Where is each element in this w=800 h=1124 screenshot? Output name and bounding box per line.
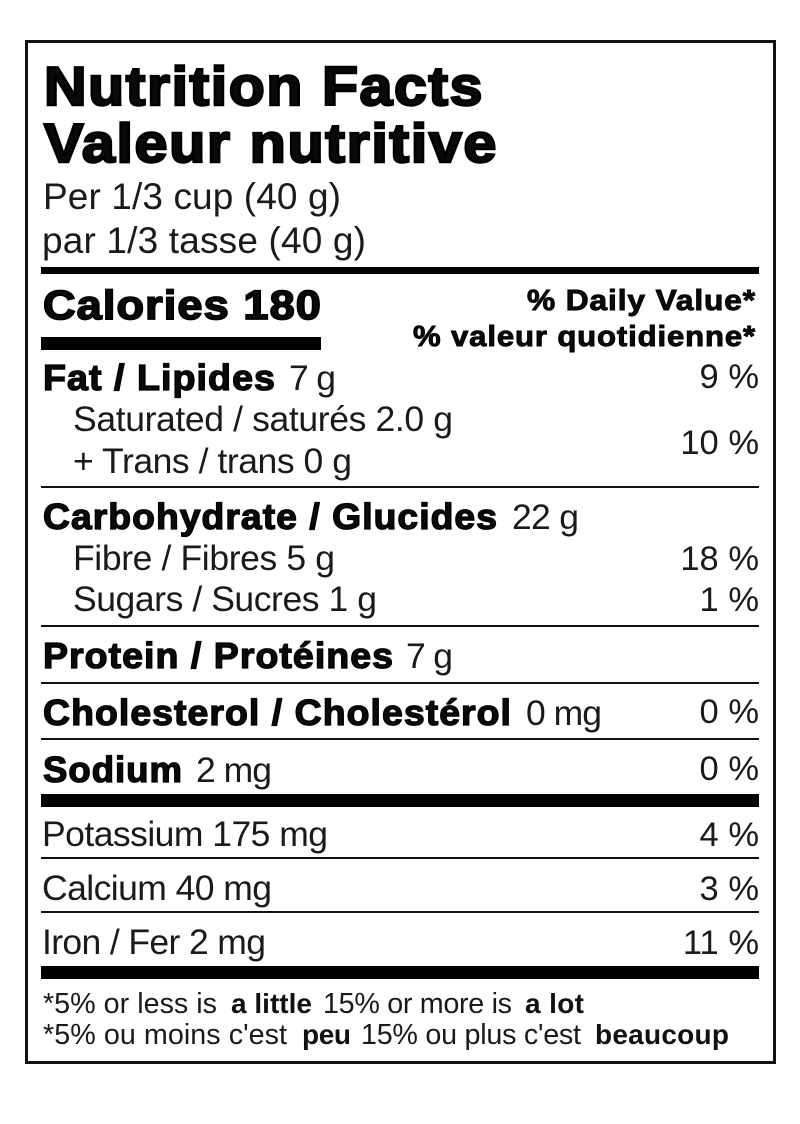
title	[44, 55, 498, 174]
row: iron: Iron / Fer 2 mg	[42, 922, 266, 962]
footnote: english: *5% or less is	[43, 988, 217, 1020]
serving size: Per 1/3 cup (40 g)	[43, 176, 341, 217]
row: fat: 9 %	[700, 358, 759, 396]
row: iron: 11 %	[683, 924, 759, 962]
row: sugars	[73, 579, 759, 619]
row: cholesterol: 0 mg	[526, 693, 602, 733]
row: calcium: 3 %	[700, 870, 759, 908]
row: cholesterol: 0 %	[700, 693, 759, 731]
row: saturated and trans	[73, 399, 759, 481]
row: fat: Fat / Lipides	[43, 357, 276, 398]
daily value heading: % Daily Value*	[527, 285, 756, 317]
row: cholesterol: Cholesterol / Cholestérol	[43, 692, 512, 733]
calories: Calories 180	[43, 282, 322, 328]
footnote: french: peu	[302, 1019, 351, 1050]
title: Valeur nutritive	[44, 112, 498, 174]
row: fibre: 18 %	[680, 540, 759, 578]
serving size: par 1/3 tasse (40 g)	[42, 220, 366, 261]
footnote: french	[43, 1019, 729, 1051]
daily value heading: % valeur quotidienne*	[413, 321, 756, 353]
row: carbohydrate: Carbohydrate / Glucides	[43, 496, 498, 537]
row: protein: Protein / Protéines	[43, 635, 394, 676]
footnote: english: a lot	[525, 988, 584, 1019]
row: potassium: 4 %	[700, 816, 759, 854]
row: fibre: Fibre / Fibres 5 g	[73, 538, 335, 578]
row: iron	[42, 922, 759, 962]
row: protein: 7 g	[406, 636, 453, 676]
row: calcium	[42, 868, 759, 908]
row: potassium: Potassium 175 mg	[42, 814, 328, 854]
row: sugars: 1 %	[700, 581, 759, 619]
serving size	[42, 176, 366, 261]
row: sodium	[43, 749, 759, 790]
row: sodium: Sodium	[43, 749, 183, 790]
row: calcium: Calcium 40 mg	[42, 868, 272, 908]
daily value heading	[413, 285, 756, 353]
row: sugars: Sugars / Sucres 1 g	[73, 579, 377, 619]
footnote: french: beaucoup	[595, 1019, 729, 1050]
calories	[41, 282, 322, 350]
row: fat: 7 g	[289, 358, 336, 398]
row: potassium	[42, 814, 759, 854]
footnote: english: 15% or more is	[323, 988, 512, 1020]
row: cholesterol	[43, 692, 759, 733]
row: fibre	[73, 538, 759, 578]
row: saturated and trans: 10 %	[680, 424, 759, 462]
footnote: french: *5% ou moins c'est	[43, 1019, 287, 1051]
row: saturated and trans: + Trans / trans 0 g	[73, 441, 352, 481]
row: sodium: 2 mg	[196, 750, 272, 790]
footnote: english: a little	[231, 988, 312, 1019]
footnote: french: 15% ou plus c'est	[361, 1019, 581, 1051]
row: fat	[43, 357, 759, 398]
footnote: english	[43, 988, 584, 1020]
row: carbohydrate: 22 g	[512, 497, 579, 537]
title: Nutrition Facts	[44, 55, 484, 117]
row: sodium: 0 %	[700, 750, 759, 788]
row: saturated and trans: Saturated / saturés 2.0 g	[73, 399, 453, 439]
